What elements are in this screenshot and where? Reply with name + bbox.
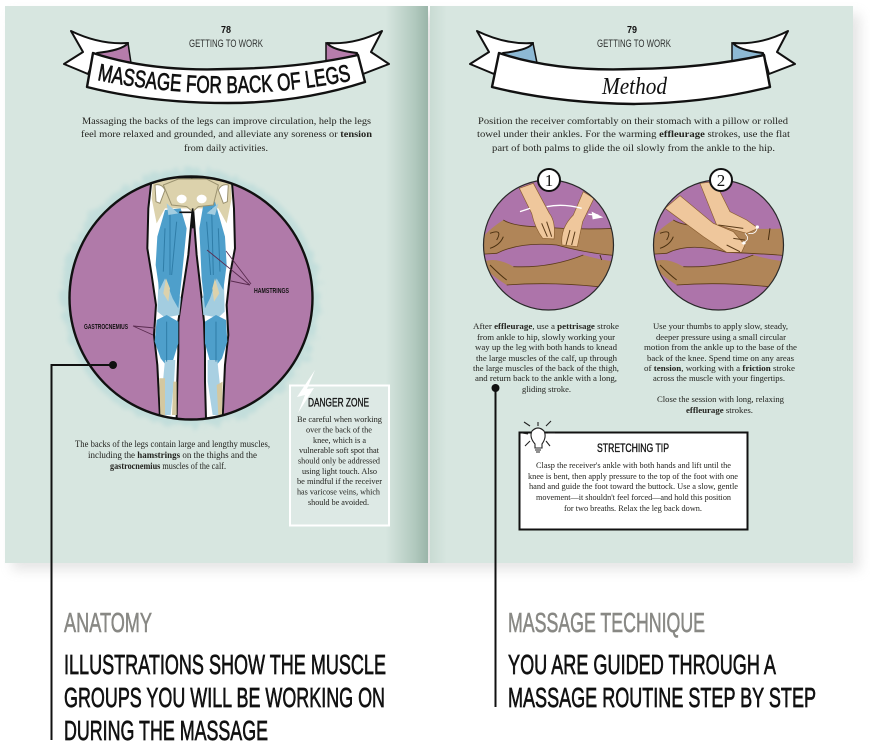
intro text: right page: Position the receiver comfortably on their stomach with a pillow or rolled bbox=[478, 116, 788, 127]
step 2 illustration bbox=[650, 169, 787, 310]
intro text: left page: Massaging the backs of the legs can improve circulation, help the legs bbox=[82, 116, 371, 127]
page header: left: GETTING TO WORK bbox=[189, 38, 263, 50]
step 2 text: of tension, working with a friction stroke bbox=[644, 364, 795, 373]
panel: left page bbox=[5, 6, 428, 563]
anatomy description text bbox=[75, 439, 270, 472]
title banner: method bbox=[470, 31, 795, 104]
panel: danger zone: Be careful when working bbox=[297, 415, 383, 424]
page header: left bbox=[189, 25, 263, 50]
anatomy illustration bbox=[62, 169, 320, 427]
intro text: left page: from daily activities. bbox=[184, 143, 268, 154]
step 1 text: gliding stroke. bbox=[522, 385, 571, 394]
step 2 text: Use your thumbs to apply slow, steady, bbox=[653, 322, 788, 331]
icon: lightning bolt bbox=[297, 370, 315, 413]
panel: stretching tip: movement—it shouldn't feel forced—and hold this position bbox=[536, 493, 732, 502]
panel: danger zone: using light touch. Also bbox=[302, 467, 377, 476]
panel: stretching tip: STRETCHING TIP bbox=[597, 441, 669, 455]
panel: stretching tip: for two breaths. Relax the leg back down. bbox=[564, 504, 702, 513]
step 2 text: deeper pressure using a small circular bbox=[656, 333, 786, 342]
step 1 illustration bbox=[480, 169, 617, 310]
intro text: right page: towel under their ankles. For the warming effleurage strokes, use the flat bbox=[477, 129, 790, 140]
step 1 text: the large muscles of the calf, up through bbox=[476, 354, 618, 363]
page header: right: 79 bbox=[627, 25, 637, 36]
step 2 text: effleurage strokes. bbox=[686, 406, 753, 415]
left leg bbox=[147, 178, 192, 418]
panel: danger zone: has varicose veins, which bbox=[297, 488, 381, 496]
step 1 text: from ankle to hip, slowly working your bbox=[477, 333, 615, 342]
caption: massage technique bbox=[508, 607, 816, 713]
intro text: right page: part of both palms to glide the oil slowly from the ankle to the hip. bbox=[492, 143, 775, 154]
step 1 text: the large muscles of the back of the thigh, bbox=[473, 364, 619, 373]
panel: danger zone: should only be addressed bbox=[298, 456, 381, 466]
right leg bbox=[192, 178, 235, 418]
title banner: massage for back of legs: MASSAGE FOR BACK OF LEGS bbox=[98, 64, 350, 94]
step 2 text: across the muscle with your fingertips. bbox=[653, 374, 785, 383]
step number 1: 1 bbox=[545, 171, 553, 190]
panel: stretching tip: hand and guide the foot toward the buttock. Use a slow, gentle bbox=[529, 482, 738, 491]
step 2 text bbox=[644, 322, 797, 415]
panel: right page bbox=[430, 6, 853, 563]
anatomy description text: The backs of the legs contain large and lengthy muscles, bbox=[75, 439, 270, 450]
panel: danger zone: knee, which is a bbox=[313, 436, 366, 445]
step 1 text: After effleurage , use a pettrisage stroke bbox=[473, 322, 619, 331]
caption: anatomy: ANATOMY bbox=[64, 607, 152, 638]
intro text: left page bbox=[81, 116, 373, 154]
page header: right: GETTING TO WORK bbox=[597, 38, 671, 50]
label: hamstrings bbox=[207, 250, 289, 295]
step number 2: 2 bbox=[717, 171, 725, 190]
label: hamstrings: HAMSTRINGS bbox=[254, 288, 289, 295]
caption: massage technique: MASSAGE TECHNIQUE bbox=[508, 607, 705, 638]
step 2 text: motion from the ankle up to the base of the bbox=[644, 343, 797, 352]
page header: left: 78 bbox=[221, 25, 231, 36]
panel: stretching tip bbox=[520, 421, 748, 530]
panel: danger zone: should be avoided. bbox=[308, 498, 369, 507]
panel: danger zone bbox=[290, 370, 389, 526]
step 2 text: back of the knee. Spend time on any areas bbox=[647, 354, 794, 363]
anatomy description text: gastrocnemius muscles of the calf. bbox=[110, 461, 226, 472]
step 1 text: way up the leg with both hands to knead bbox=[475, 343, 618, 352]
panel: stretching tip: knee is bent, then apply pressure to the top of the foot with one bbox=[528, 472, 738, 481]
step number 2 bbox=[710, 169, 732, 191]
step 2 text: Close the session with long, relaxing bbox=[657, 395, 785, 404]
callout line: massage technique bbox=[492, 384, 500, 707]
step number 1 bbox=[538, 169, 560, 191]
panel: stretching tip: Clasp the receiver's ankle with both hands and lift until the bbox=[536, 461, 731, 470]
panel: danger zone: over the back of the bbox=[306, 426, 372, 434]
title banner: massage for back of legs bbox=[63, 30, 390, 104]
intro text: left page: feel more relaxed and grounded, and alleviate any soreness or tension bbox=[81, 129, 373, 140]
panel: danger zone: DANGER ZONE bbox=[308, 396, 369, 410]
label: gastrocnemius: GASTROCNEMIUS bbox=[84, 324, 128, 331]
panel: danger zone: vulnerable soft spot that bbox=[299, 446, 380, 455]
caption: anatomy: GROUPS YOU WILL BE WORKING ON bbox=[64, 682, 385, 713]
caption: anatomy: ILLUSTRATIONS SHOW THE MUSCLE bbox=[64, 649, 386, 680]
caption: anatomy bbox=[64, 607, 386, 743]
anatomy description text: including the hamstrings on the thighs and the bbox=[88, 450, 257, 461]
label: gastrocnemius bbox=[84, 324, 155, 335]
step 1 text: and return back to the ankle with a long, bbox=[475, 374, 617, 383]
title banner: method: Method bbox=[601, 74, 668, 100]
page header: right bbox=[597, 25, 671, 50]
icon: light bulb bbox=[522, 421, 555, 452]
intro text: right page bbox=[477, 116, 790, 154]
callout line: anatomy bbox=[52, 361, 117, 740]
panel: danger zone: be mindful if the receiver bbox=[297, 477, 382, 486]
pelvis bbox=[155, 179, 228, 228]
step 1 text bbox=[473, 322, 619, 394]
